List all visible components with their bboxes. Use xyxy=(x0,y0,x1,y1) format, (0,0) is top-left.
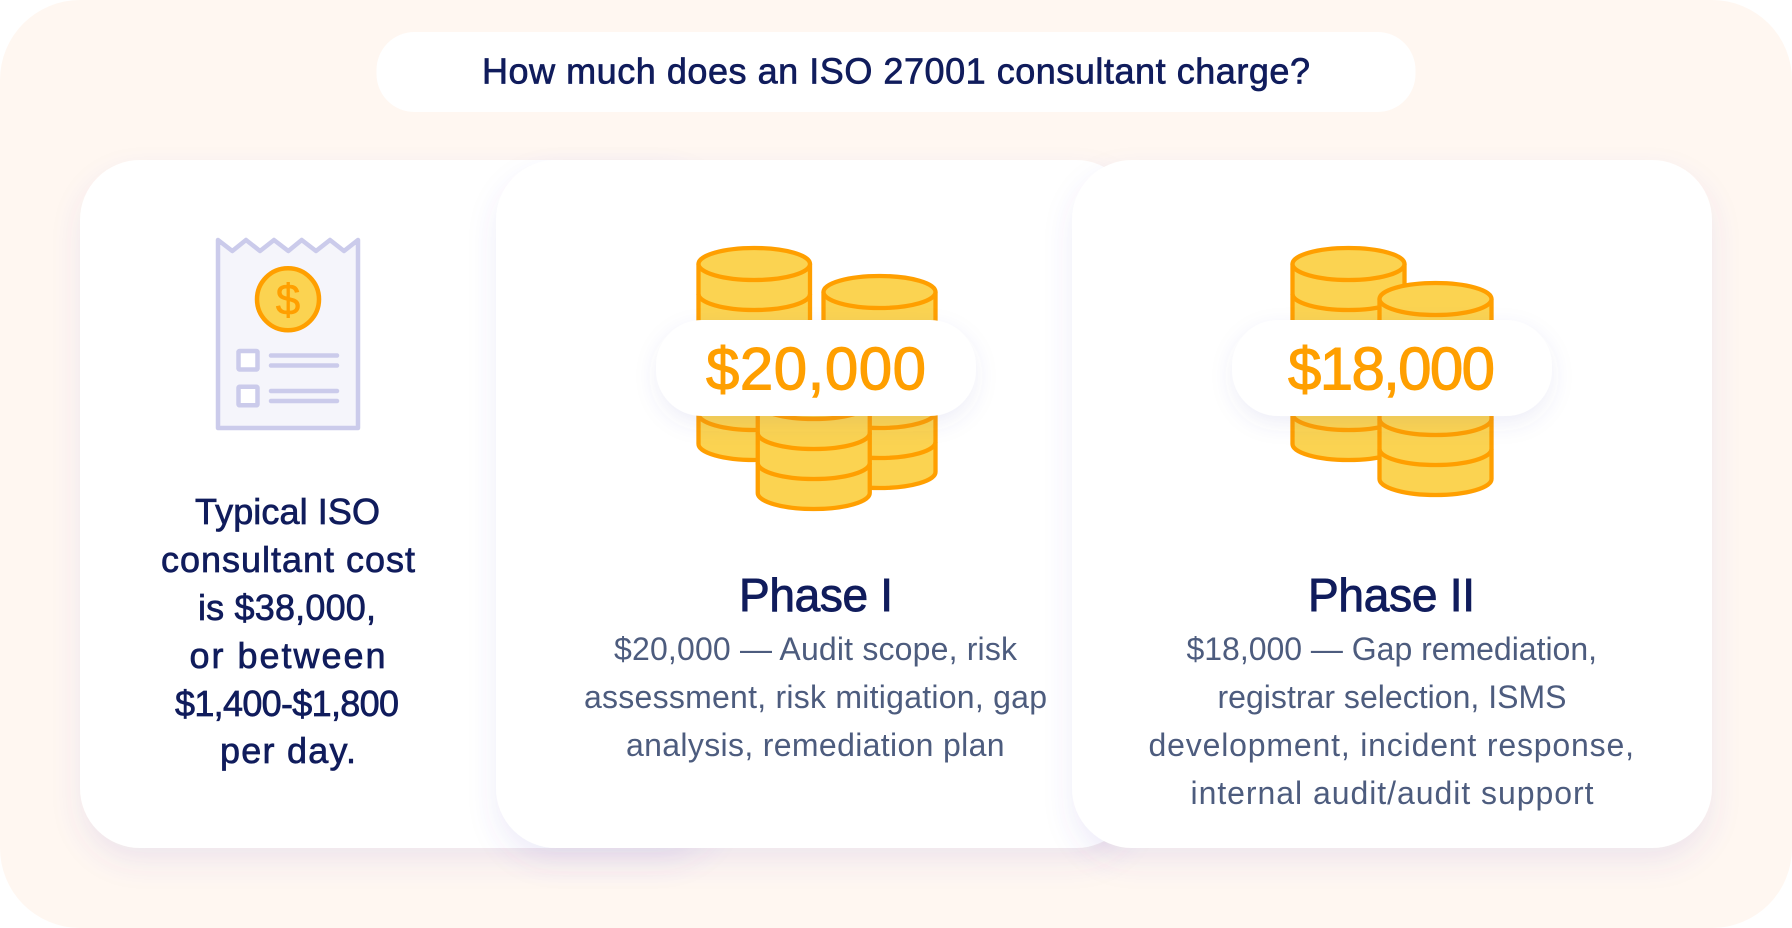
text: typical consultant cost: is $38,000, xyxy=(198,587,376,628)
panel: typical cost xyxy=(80,160,720,848)
text: typical consultant cost: $1,400-$1,800 xyxy=(175,683,399,724)
price pill: $20,000 xyxy=(656,320,976,416)
text: typical consultant cost: or between xyxy=(190,635,386,676)
heading: Phase I: Phase I xyxy=(739,569,893,621)
text: phase I description: $20,000 — Audit scope, risk xyxy=(614,631,1018,667)
price pill: $20,000: $20,000 xyxy=(706,336,926,402)
price pill: $18,000: $18,000 xyxy=(1288,336,1495,402)
icon: coin stacks phase I xyxy=(698,248,936,509)
text: phase I description: analysis, remediation plan xyxy=(626,727,1004,763)
price pill: $18,000 xyxy=(1232,320,1552,416)
title pill: How much does an ISO 27001 consultant charge? xyxy=(482,50,1310,92)
panel: phase I xyxy=(496,160,1136,848)
icon: receipt with dollar coin xyxy=(218,240,358,428)
icon: receipt with dollar coin: $ xyxy=(276,276,300,324)
text: typical consultant cost xyxy=(161,491,415,771)
panel: phase II xyxy=(1072,160,1712,848)
text: typical consultant cost: consultant cost xyxy=(161,539,415,580)
text: phase II description: $18,000 — Gap remediation, xyxy=(1186,631,1597,667)
text: phase I description: assessment, risk mitigation, gap xyxy=(584,679,1047,715)
text: phase II description: registrar selection, ISMS xyxy=(1218,679,1566,715)
title pill xyxy=(376,32,1416,112)
heading: Phase II: Phase II xyxy=(1308,569,1475,621)
text: phase II description xyxy=(1148,631,1634,811)
text: typical consultant cost: per day. xyxy=(220,730,356,771)
icon: coin stacks phase II xyxy=(1292,248,1492,495)
text: phase II description: development, incident response, xyxy=(1148,727,1634,763)
text: typical consultant cost: Typical ISO xyxy=(195,491,380,532)
text: phase I description xyxy=(584,631,1047,763)
text: phase II description: internal audit/audit support xyxy=(1190,775,1594,811)
